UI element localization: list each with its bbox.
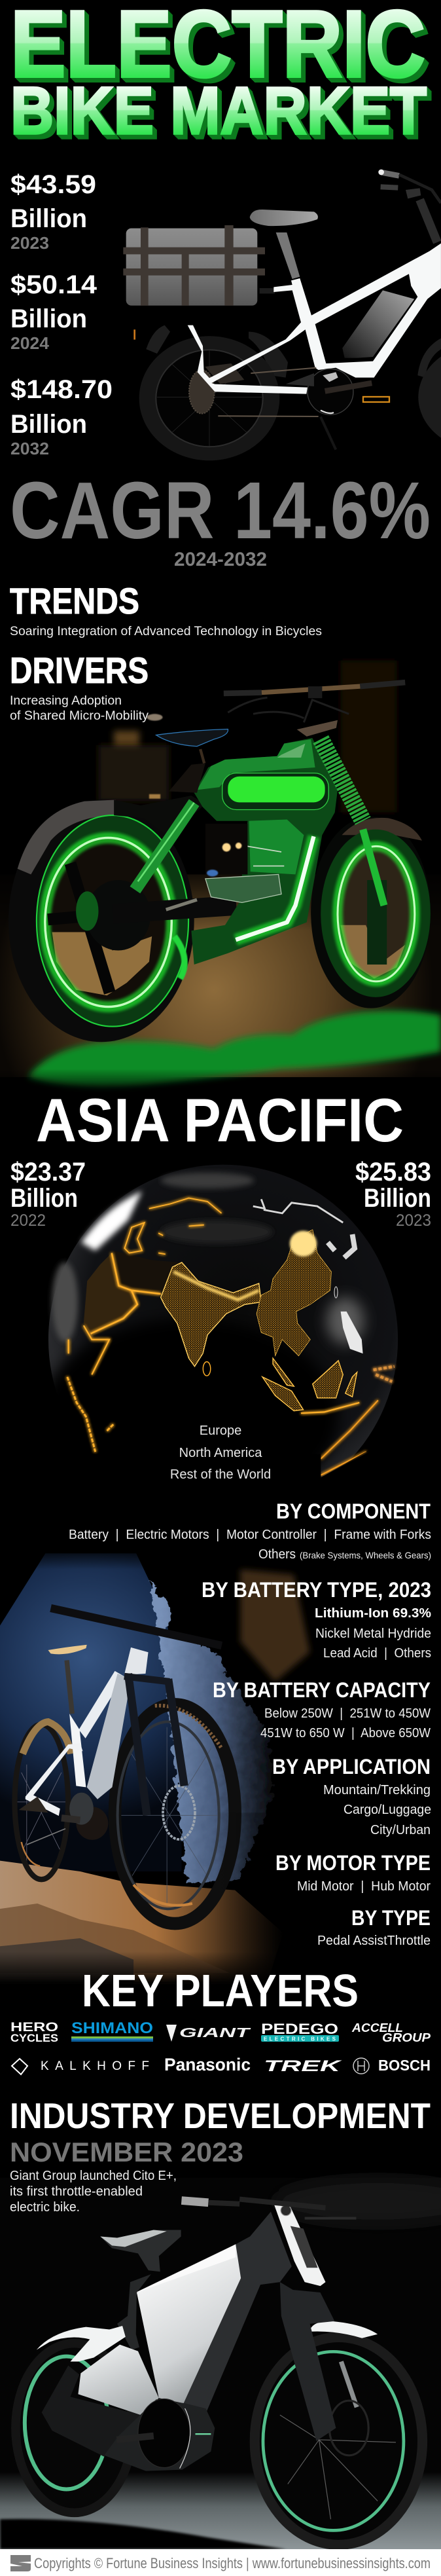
2023 value: 2023 — [10, 233, 49, 253]
front wheel — [255, 2337, 423, 2545]
logo: Trek: TREK — [264, 2057, 342, 2075]
indian plain glow — [173, 1272, 259, 1300]
2024 value: $50.14 — [10, 270, 97, 299]
segment: by motor type: Mid Motor | Hub Motor — [297, 1879, 431, 1894]
saddle — [250, 210, 318, 226]
logo: Accell Group: GROUP — [382, 2031, 431, 2044]
rear wheel — [133, 325, 288, 460]
land: India — [161, 1262, 261, 1367]
street background — [0, 661, 441, 1077]
crank — [218, 368, 389, 450]
date: NOVEMBER 2023 — [10, 2137, 243, 2167]
image: mountain e-bike — [0, 1545, 419, 1983]
image: cargo e-bike — [123, 170, 441, 460]
Asia Pacific 2023 value: $25.83 — [355, 1158, 431, 1187]
logo: Giant — [166, 2025, 251, 2042]
land: Arabia — [84, 1253, 137, 1334]
handlebar — [181, 2199, 356, 2218]
segment: by application: Cargo/Luggage — [344, 1803, 431, 1817]
Asia Pacific 2022 value — [10, 1158, 86, 1230]
right edge mask — [321, 1386, 406, 1519]
stats: market size — [10, 170, 113, 458]
fork — [280, 2282, 336, 2441]
islands — [262, 1358, 357, 1411]
swing arm — [42, 2365, 141, 2457]
drivers text: of Shared Micro-Mobility — [10, 709, 149, 723]
motor and crank — [19, 1793, 108, 1845]
2024 value — [10, 270, 97, 353]
heading: key players: KEY PLAYERS — [82, 1965, 359, 2016]
Asia Pacific 2023 value: 2023 — [396, 1211, 431, 1230]
handlebar — [51, 1608, 222, 1646]
segment: by battery type: Lead Acid | Others — [323, 1646, 431, 1661]
cave background — [0, 1553, 310, 1882]
light strip — [236, 836, 313, 940]
2024 value: 2024 — [10, 333, 50, 353]
segment: by battery capacity: 451W to 650 W | Above 650W — [260, 1726, 431, 1740]
2032 value: Billion — [10, 410, 87, 439]
other regions: Europe — [200, 1424, 241, 1438]
ocean shadow — [39, 1319, 338, 1515]
bottom fade — [0, 1951, 419, 1983]
CAGR period: 2024-2032 — [174, 549, 267, 570]
segment: by battery type: Nickel Metal Hydride — [315, 1627, 431, 1641]
rear fender — [37, 2326, 126, 2362]
cloud glow — [81, 1191, 142, 1251]
2032 value: $148.70 — [10, 375, 113, 404]
segment: by type: Pedal AssistThrottle — [317, 1934, 431, 1948]
logo: Hero Cycles: CYCLES — [10, 2032, 58, 2044]
right fade — [214, 1812, 419, 1983]
white head panel — [273, 2203, 326, 2286]
2023 value: $43.59 — [10, 170, 96, 199]
land: China and mainland Southeast Asia — [256, 1230, 331, 1356]
footer — [0, 2549, 441, 2576]
top fade — [0, 1545, 419, 1570]
logo: Kalkhoff: KALKHOFF — [41, 2059, 149, 2073]
saddle and post — [48, 1645, 87, 1714]
logo: Panasonic: Panasonic — [164, 2055, 251, 2074]
rear fender and swingarm — [113, 796, 236, 914]
handlebar — [224, 682, 405, 722]
segment: by component: Battery | Electric Motors | Motor Controller | Frame with Forks — [69, 1528, 431, 1542]
land: Iran and central Asia — [114, 1251, 179, 1293]
other regions: Rest of the World — [170, 1467, 271, 1482]
suspension fork — [321, 739, 363, 821]
Asia Pacific 2022 value: 2022 — [10, 1211, 46, 1230]
lower white body — [78, 2345, 159, 2415]
drivers text: Increasing Adoption — [10, 694, 122, 708]
Asia Pacific 2022 value: Billion — [10, 1184, 78, 1213]
rack mount — [260, 288, 275, 293]
seat post — [276, 232, 300, 279]
development text — [10, 2169, 177, 2215]
logo: Bosch — [353, 2057, 431, 2074]
fork — [124, 1674, 185, 1815]
globe — [39, 1165, 406, 1519]
Asia Pacific 2023 value — [355, 1158, 431, 1230]
segment: by application: Mountain/Trekking — [323, 1783, 431, 1797]
night lights under frame — [205, 824, 247, 876]
drivers text — [10, 694, 149, 723]
bottom mask — [39, 1433, 406, 1519]
segment: by battery capacity: Below 250W | 251W to 450W — [264, 1706, 431, 1721]
other regions — [170, 1424, 271, 1482]
2023 value — [10, 170, 96, 253]
2032 value: 2032 — [10, 439, 49, 458]
logo: Pedego: ELECTRIC BIKES — [264, 2036, 336, 2042]
bright city glow — [290, 1231, 317, 1257]
trends — [10, 580, 322, 638]
front wheel — [115, 1704, 235, 1924]
dark head and down tube — [184, 2212, 292, 2414]
2024 value: Billion — [10, 304, 87, 333]
rear wheel — [14, 1721, 71, 1879]
motor housing — [104, 2399, 215, 2471]
rear link — [117, 2274, 151, 2350]
trends text: Soaring Integration of Advanced Technology in Bicycles — [10, 625, 322, 638]
segment: by application — [272, 1755, 431, 1837]
Sri Lanka — [203, 1362, 211, 1376]
sphere — [48, 1165, 398, 1515]
seat post — [200, 749, 204, 764]
image: green motorbike — [0, 661, 441, 1097]
land outlines and lights — [67, 1198, 395, 1475]
segment: by component: (Brake Systems, Wheels & Gears) — [300, 1550, 431, 1560]
development text: Giant Group launched Cito E+, — [10, 2169, 177, 2183]
Japan and north coast — [253, 1199, 355, 1298]
logo: Pedego — [261, 2021, 339, 2042]
2023 value: Billion — [10, 204, 87, 233]
rear wheel — [16, 2344, 133, 2512]
panel highlight — [137, 2244, 236, 2292]
handlebar — [378, 170, 441, 242]
rear wheel — [9, 800, 194, 1042]
Philippines — [341, 1312, 363, 1353]
heading: Asia Pacific: ASIA PACIFIC — [36, 1086, 404, 1154]
trends: TRENDS — [10, 580, 139, 621]
2032 value — [10, 375, 113, 458]
segment: by battery type — [202, 1578, 431, 1661]
logo: Accell Group: ACCELL — [351, 2021, 403, 2034]
main white panel — [137, 2244, 241, 2403]
battery — [342, 290, 414, 358]
segment: by component: Others — [258, 1547, 296, 1562]
segment: by component — [69, 1500, 431, 1562]
ground — [0, 1861, 283, 1983]
footer logo — [10, 2555, 31, 2571]
background and floor — [0, 2178, 441, 2549]
saddle — [156, 729, 228, 746]
segment: by type — [317, 1906, 431, 1948]
head — [297, 720, 338, 737]
title — [10, 0, 427, 148]
image: white concept e-bike — [0, 2178, 441, 2549]
cargo box — [123, 225, 265, 306]
frame body — [169, 738, 338, 965]
logo: Giant: GIANT — [179, 2026, 251, 2040]
logo: Bosch: BOSCH — [378, 2057, 431, 2074]
drivers: DRIVERS — [10, 650, 149, 691]
logo: Hero Cycles: HERO — [10, 2021, 58, 2034]
segment: by motor type — [275, 1851, 431, 1894]
drivers — [10, 650, 149, 723]
other regions: North America — [179, 1446, 262, 1460]
pedal cage — [205, 874, 281, 902]
Asia Pacific 2022 value: $23.37 — [10, 1158, 86, 1187]
front wheel — [417, 339, 441, 452]
logo: Shimano: SHIMANO — [71, 2019, 153, 2037]
segment: by type: BY TYPE — [351, 1906, 431, 1930]
road reflection — [0, 1011, 441, 1097]
front fender — [310, 2321, 378, 2338]
frame — [188, 244, 441, 394]
frame — [26, 1647, 149, 1816]
logo: Kalkhoff — [12, 2059, 149, 2074]
glowing panel — [222, 773, 328, 809]
development text: its first throttle-enabled — [10, 2184, 143, 2199]
development text: electric bike. — [10, 2200, 80, 2215]
logo: Accell Group — [351, 2021, 431, 2044]
front wheel — [311, 817, 431, 1008]
segment: by battery type: Lithium-Ion 69.3% — [315, 1606, 431, 1621]
segment: by battery capacity — [213, 1678, 431, 1740]
logo: Hero Cycles — [10, 2021, 58, 2044]
saddle — [100, 2230, 181, 2272]
logo: Pedego: PEDEGO — [261, 2021, 338, 2037]
segment: by application: City/Urban — [370, 1823, 431, 1837]
